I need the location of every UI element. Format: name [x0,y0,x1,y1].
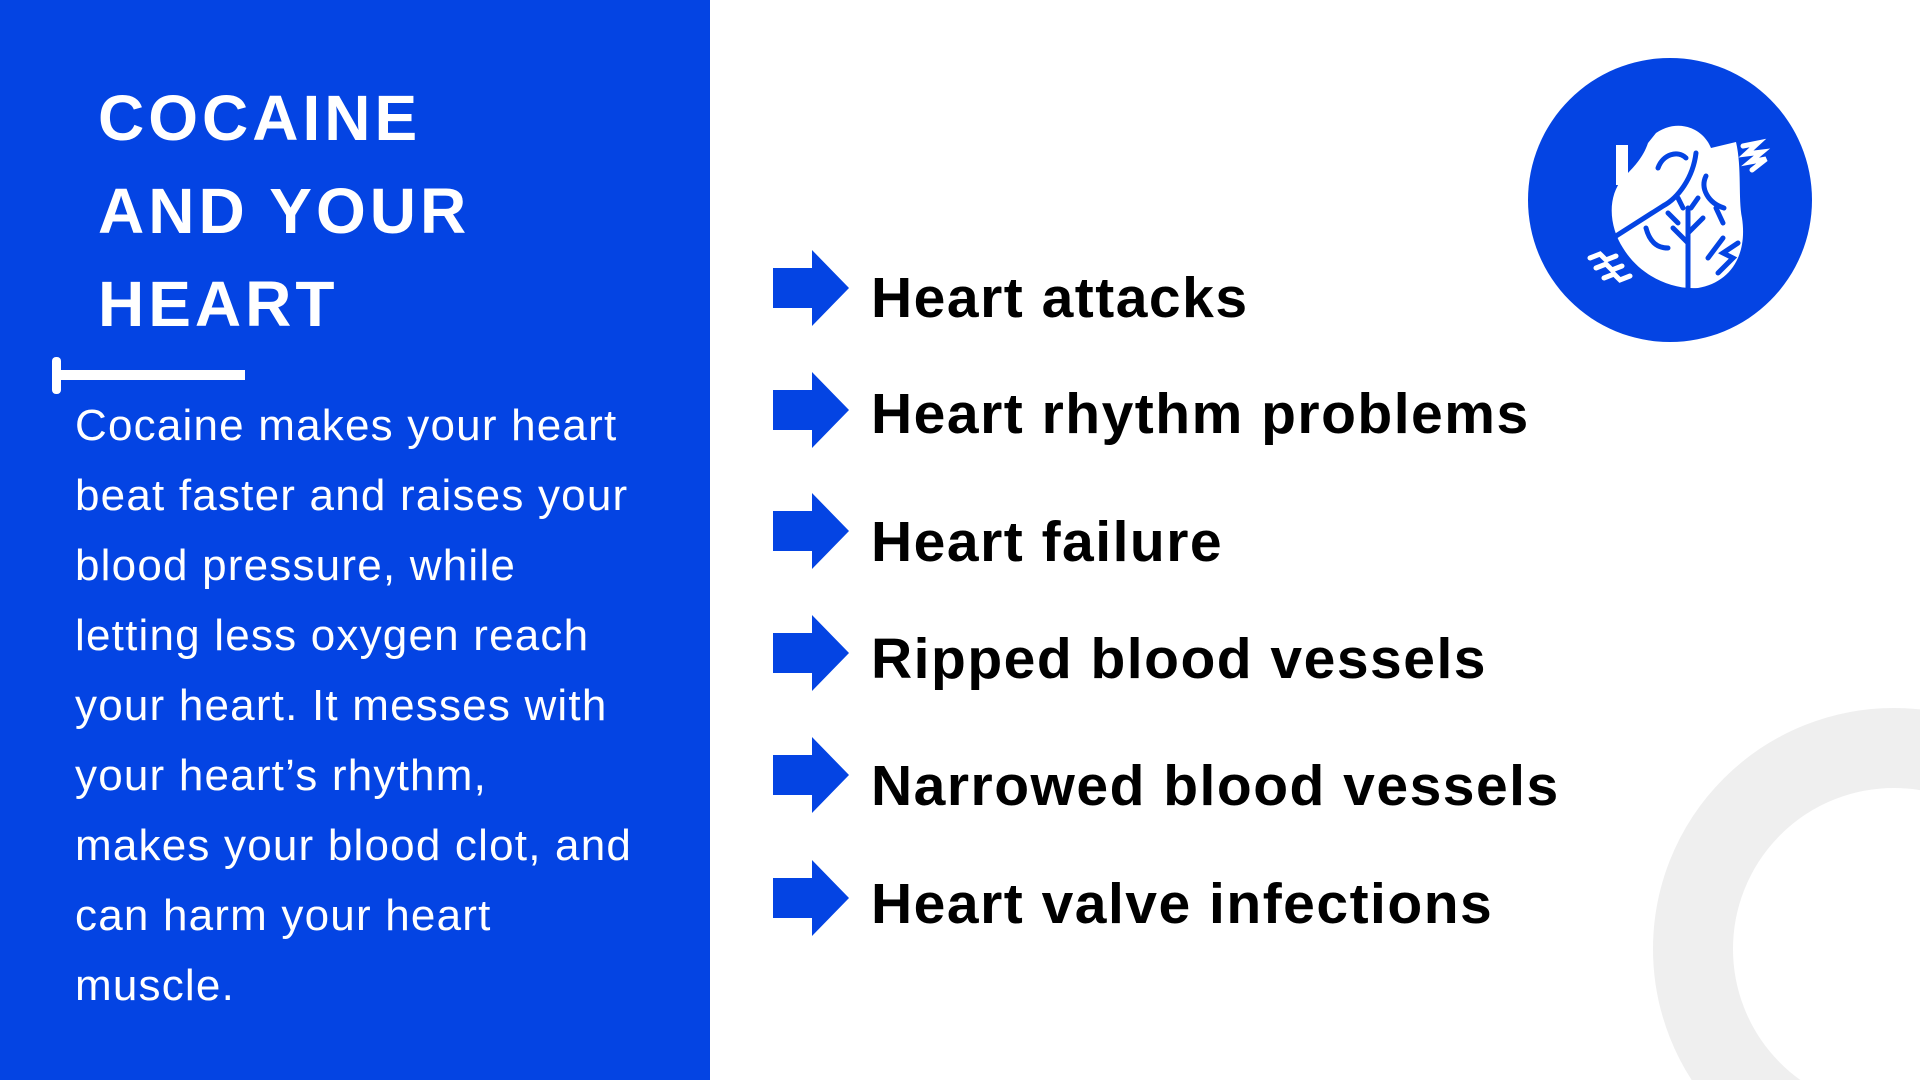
title: COCAINE [98,82,421,154]
item 1: Heart attacks [871,266,1249,330]
arrow 5 [773,737,849,813]
arrow 2 [773,372,849,448]
text block: description: your heart. It messes with [75,681,608,730]
arrow 1 [773,250,849,326]
title: AND YOUR [98,175,470,247]
title [98,82,470,340]
item 5: Narrowed blood vessels [871,754,1560,818]
item 6: Heart valve infections [871,872,1493,936]
text block: description [75,401,632,1010]
panel: left blue [0,0,710,1080]
arrow 4 [773,615,849,691]
text block: description: beat faster and raises your [75,471,628,520]
item 4: Ripped blood vessels [871,627,1487,691]
text block: description: can harm your heart [75,891,492,940]
item 3: Heart failure [871,510,1223,574]
text block: description: muscle. [75,961,235,1010]
text block: description: Cocaine makes your heart [75,401,617,450]
text block: description: letting less oxygen reach [75,611,589,660]
arrow 6 [773,860,849,936]
item 2: Heart rhythm problems [871,382,1530,446]
arrow 3 [773,493,849,569]
text block: description: your heart’s rhythm, [75,751,487,800]
icon: heart circle [1528,58,1812,342]
title: HEART [98,268,338,340]
text block: description: makes your blood clot, and [75,821,632,870]
text block: description: blood pressure, while [75,541,516,590]
divider [52,357,245,394]
